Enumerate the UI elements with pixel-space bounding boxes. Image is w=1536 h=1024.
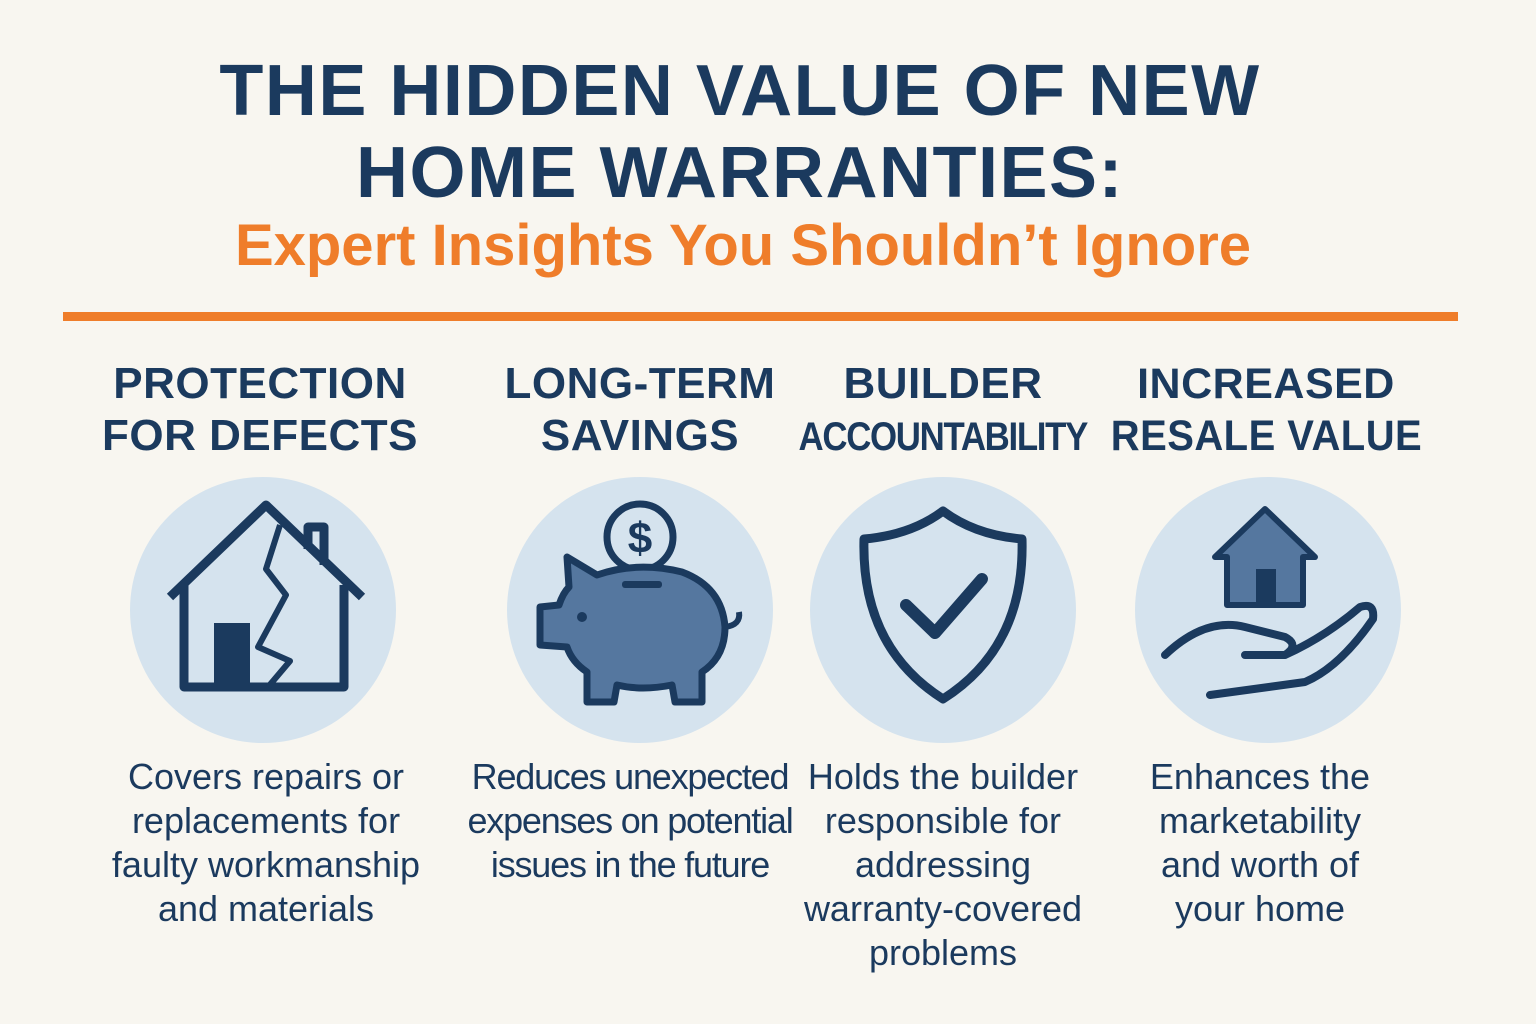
text: savings xyxy=(467,756,793,885)
icon: shield check xyxy=(810,477,1076,743)
text: accountability: warranty-covered xyxy=(804,888,1082,929)
text: savings: issues in the future xyxy=(491,844,769,885)
text: resale xyxy=(1150,756,1370,929)
text: accountability: Holds the builder xyxy=(808,756,1078,797)
icon: cracked house xyxy=(130,477,396,743)
heading: resale xyxy=(1110,360,1422,460)
title xyxy=(219,51,1261,213)
text: savings: Reduces unexpected xyxy=(472,756,788,797)
divider rule xyxy=(63,312,1458,321)
text: resale: marketability xyxy=(1159,800,1361,841)
heading: protection xyxy=(102,359,418,460)
text: protection: Covers repairs or xyxy=(128,756,404,797)
text: resale: your home xyxy=(1175,888,1345,929)
heading: accountability: BUILDER xyxy=(843,359,1043,408)
subtitle: Expert Insights You Shouldn’t Ignore xyxy=(235,213,1251,278)
text: accountability xyxy=(804,756,1082,973)
text: protection xyxy=(112,756,420,929)
heading: protection: PROTECTION xyxy=(113,359,407,408)
heading: resale: INCREASED xyxy=(1137,360,1395,408)
heading: savings: LONG-TERM xyxy=(505,359,775,408)
title: THE HIDDEN VALUE OF NEW xyxy=(219,51,1261,131)
text: savings: expenses on potential xyxy=(467,800,793,841)
text: accountability: addressing xyxy=(855,844,1031,885)
icon: piggy bank xyxy=(507,477,773,743)
heading: accountability: ACCOUNTABILITY xyxy=(799,415,1087,459)
text: accountability: problems xyxy=(869,932,1017,973)
icon: hand with house xyxy=(1135,477,1401,743)
heading: savings: SAVINGS xyxy=(541,411,739,460)
text: protection: and materials xyxy=(158,888,374,929)
text: protection: replacements for xyxy=(132,800,400,841)
heading: accountability xyxy=(799,359,1088,459)
text: resale: Enhances the xyxy=(1150,756,1370,797)
text: accountability: responsible for xyxy=(825,800,1061,841)
icon: piggy bank: $ xyxy=(628,514,652,563)
heading: protection: FOR DEFECTS xyxy=(102,411,418,460)
text: protection: faulty workmanship xyxy=(112,844,420,885)
heading: savings xyxy=(505,359,775,460)
title: HOME WARRANTIES: xyxy=(356,133,1124,213)
text: resale: and worth of xyxy=(1161,844,1359,885)
heading: resale: RESALE VALUE xyxy=(1110,412,1422,460)
